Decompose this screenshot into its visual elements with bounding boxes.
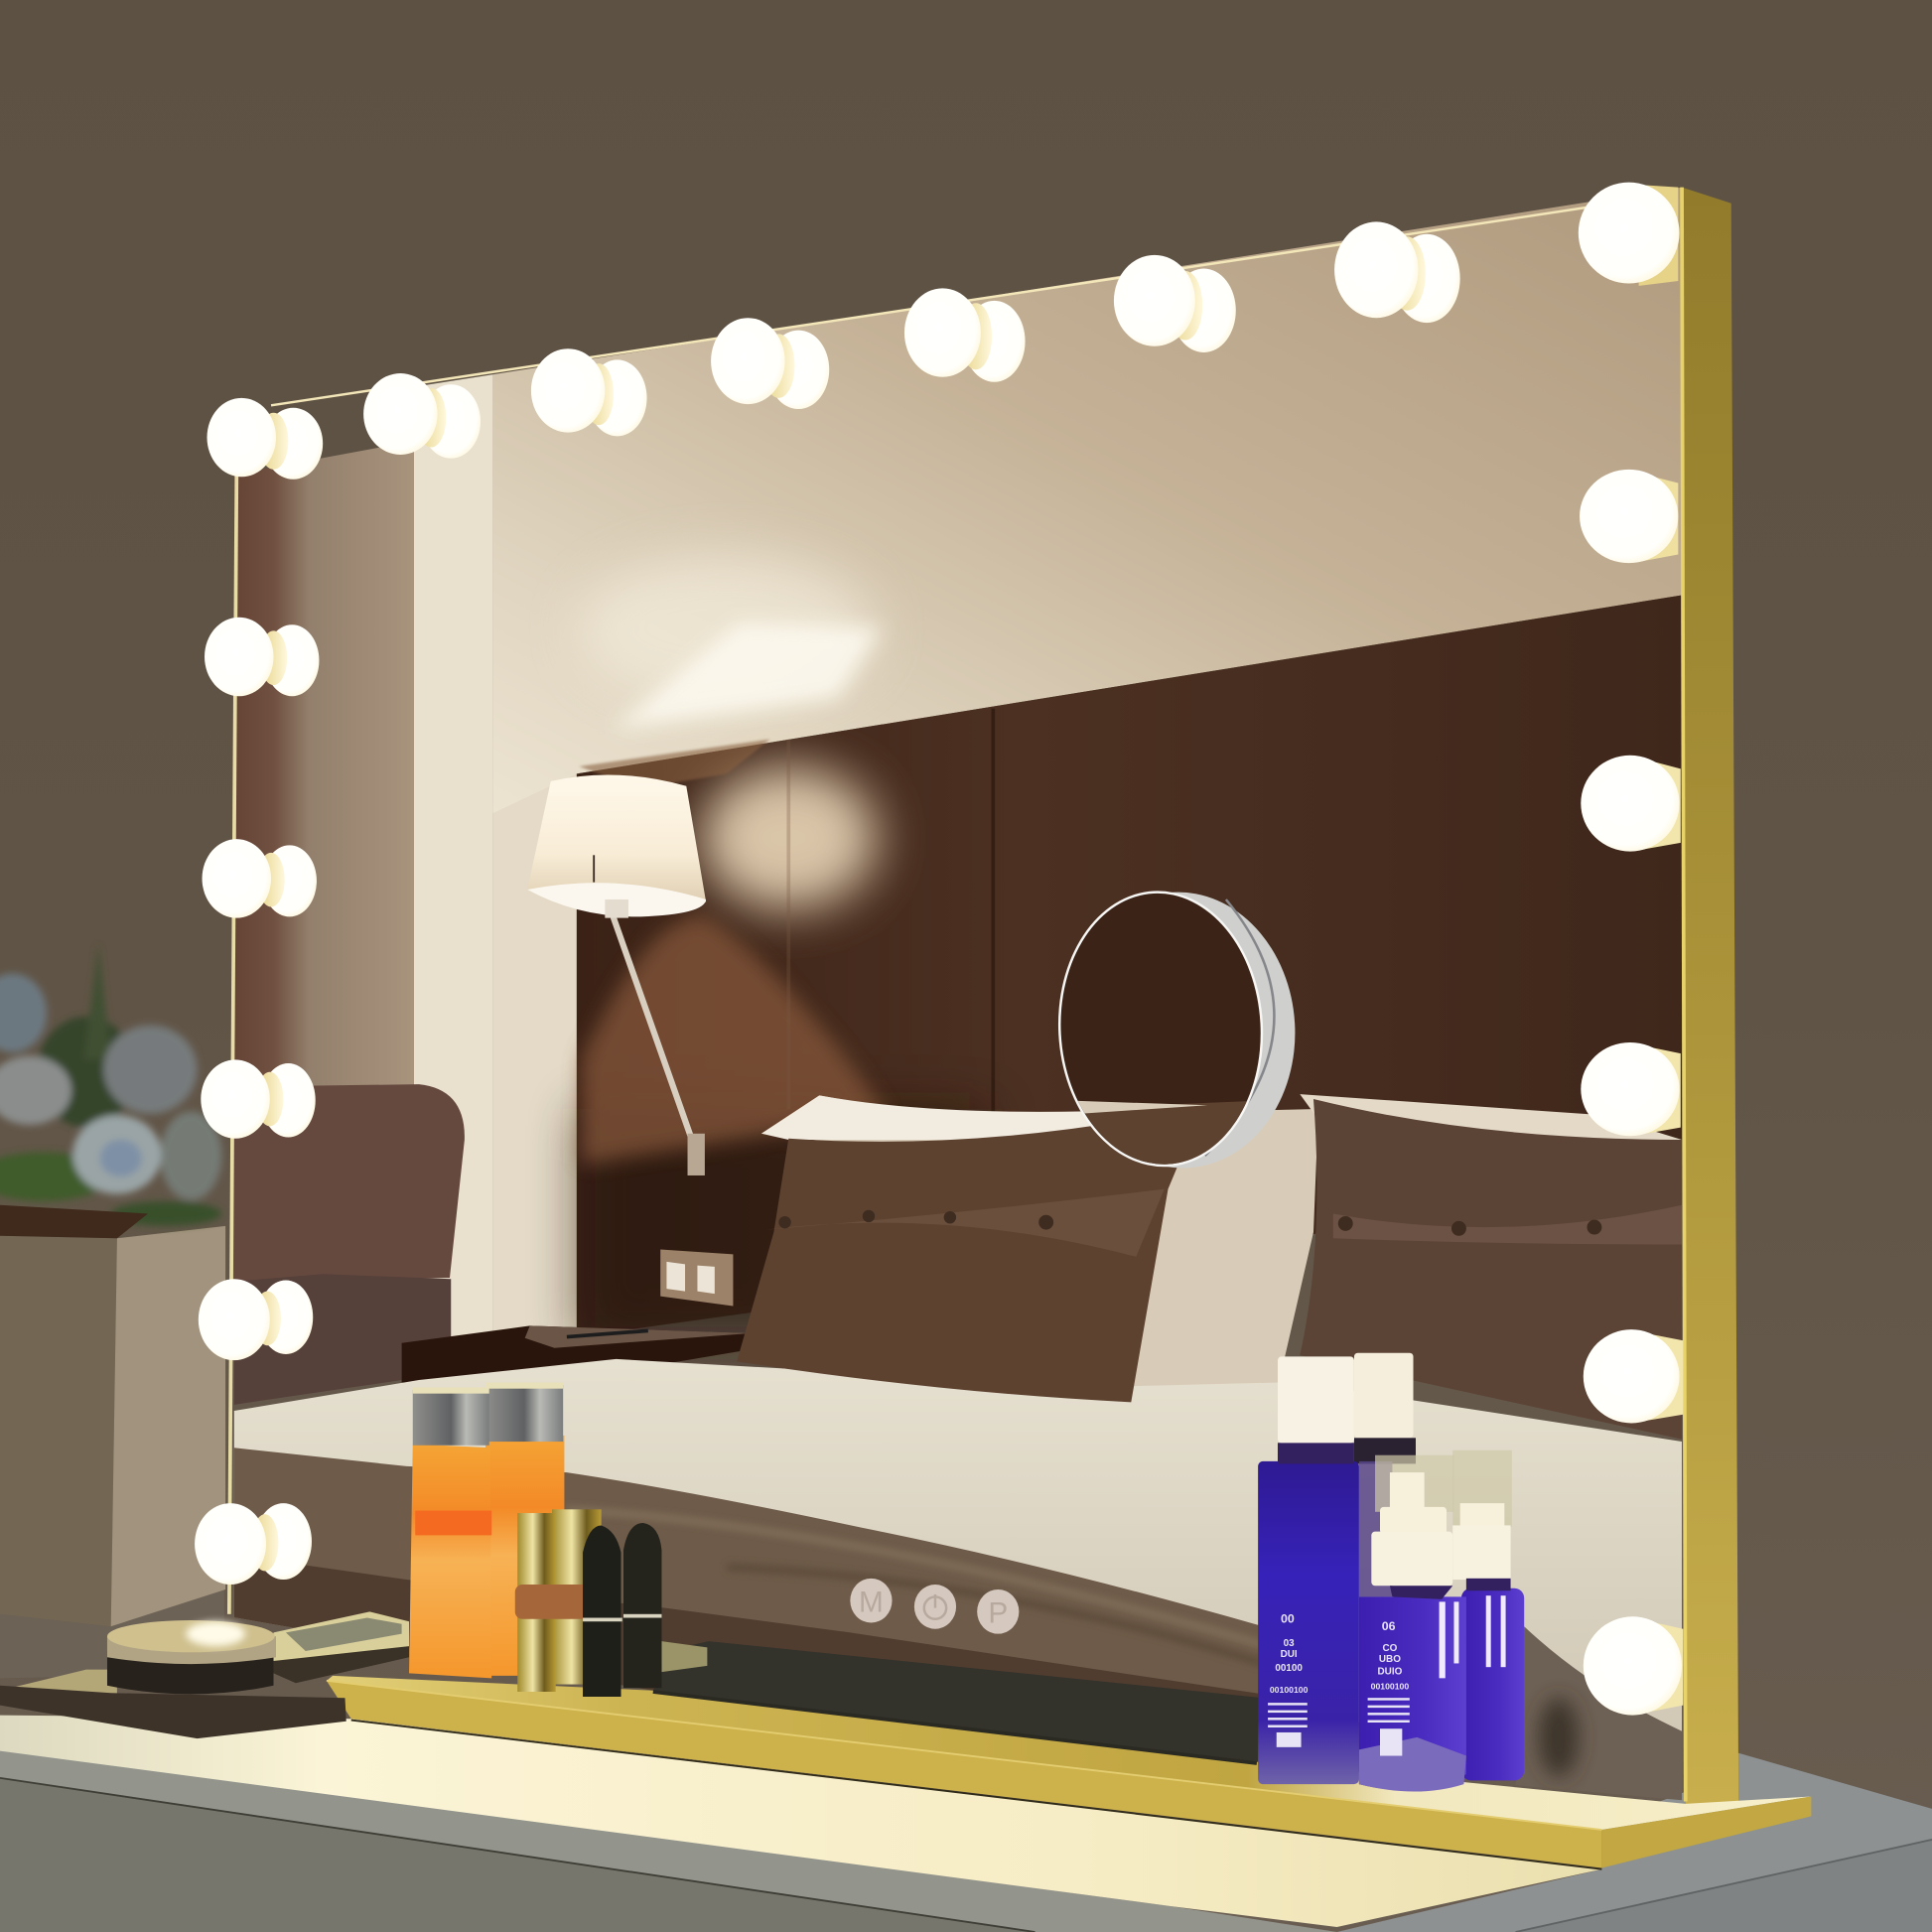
left dark wall [234,441,414,1109]
magnifier white edge [1051,886,1270,1172]
magnifier ring seam [1205,899,1274,1156]
bulb corner [1579,183,1680,286]
compact rim [107,1636,276,1664]
gold lipstick front [517,1513,556,1692]
dresser [0,1716,1932,1932]
compact lid [107,1620,275,1652]
bulb left 2 [205,618,319,696]
base front face [327,1681,1601,1867]
right bottle cap [485,1385,563,1442]
bulb right 6 [1584,1616,1683,1716]
wall lamp [527,774,706,1175]
tall bottle label: 00100 [1275,1663,1303,1674]
back cap and neck [1354,1353,1414,1438]
ceiling reflection [492,185,1682,813]
black tablet [0,1686,346,1738]
bulb top 3 [531,348,647,436]
armchair seat [234,1274,451,1405]
pump bottle label: 00100100 [1371,1682,1409,1692]
round magnifying mirror [1047,886,1302,1182]
pump bottle label: UBO [1379,1654,1401,1665]
headboard lit arch [582,917,888,1165]
brown pillow left [737,1126,1177,1402]
planter with flowers [0,942,225,1678]
planter side [111,1226,225,1626]
dresser corner panel [0,1749,1337,1932]
gold base [327,1676,1811,1869]
top row bulbs [207,221,1460,480]
pump bottle label [1368,1619,1410,1756]
touch button M [850,1579,893,1622]
bedside table [402,1325,752,1382]
magnifier back ring [1058,887,1302,1173]
touch button M: M [859,1586,884,1618]
bulb left 6 [195,1503,312,1585]
tall bottle label: 00100100 [1270,1685,1309,1695]
orange bottles [409,1382,564,1678]
bulb right 3 [1581,756,1681,852]
tall bottle cap [1278,1356,1354,1443]
left bottle body [409,1445,491,1678]
bed sheet [234,1359,1682,1749]
planter base shadow [0,1589,224,1678]
front pump bottle [1359,1455,1466,1792]
dresser right surface [1337,1751,1932,1932]
armchair [234,1084,465,1405]
right column bulbs [1579,183,1683,1716]
tall bottle label: 03 [1284,1638,1295,1649]
light wall columns [413,369,492,1355]
compact base [107,1651,274,1694]
cream pillow left [761,1095,1318,1386]
pump bottle label: 06 [1382,1619,1396,1633]
mirror with bedroom reflection [234,185,1682,1811]
bulb top 1 [207,398,323,480]
gold mirror side frame [1682,188,1738,1806]
lamp wall plate [688,1134,705,1175]
bright ceiling light patch [579,554,875,702]
bulb top 2 [363,373,481,459]
flower foliage [0,942,221,1226]
bulb left 3 [203,839,317,918]
bulb right 5 [1584,1329,1683,1423]
bulb left 5 [199,1279,313,1360]
mirror edge highlights [229,188,1686,1801]
headboard lamp glow [700,766,878,909]
wood panel seams [992,709,995,1121]
base top surface [327,1676,1811,1830]
lamp collar [605,899,628,918]
bulb top 4 [711,318,829,409]
black lipstick front [583,1525,621,1697]
mirror slot shadow [653,1692,1257,1763]
gold tray left side [0,1670,117,1707]
bulb top 6 [1114,255,1236,352]
tall bottle label: DUI [1281,1649,1298,1660]
planter rim [0,1205,148,1238]
tall bottle neck [1278,1443,1354,1463]
armchair back [234,1084,465,1282]
bulb right 2 [1580,470,1678,563]
right back bottle [1452,1450,1524,1780]
cosmetic compact [107,1620,276,1694]
dresser lit top [0,1716,1601,1927]
bulb top 5 [904,288,1026,382]
brown pillow right [1300,1094,1682,1440]
left bottle cap [413,1390,489,1446]
headboard lower shadow [579,1109,986,1343]
dresser front panel [0,1778,1035,1932]
lamp arm [614,918,695,1149]
bulb top 7 [1334,221,1460,323]
pump bottle label: CO [1382,1643,1398,1654]
ceiling shadow over lamp [579,740,770,788]
touch button power [914,1585,956,1629]
flat case behind compact [274,1611,409,1683]
lamp shade [527,774,706,907]
lamp shade underside [527,883,706,916]
base side [1601,1796,1811,1867]
dark wood headboard [577,595,1682,1337]
purple bottles [1258,1353,1524,1792]
tall bottle label: 00 [1281,1611,1295,1625]
tall bottle label [1268,1611,1309,1747]
bulb right 4 [1581,1042,1681,1136]
lipsticks [515,1509,661,1697]
pump bottle label: DUIO [1378,1667,1403,1678]
black lipstick back [623,1523,661,1688]
dark LED panel [653,1641,1263,1762]
touch button P [977,1589,1019,1634]
bulb left 4 [201,1059,316,1139]
magnifier glass [1047,888,1282,1182]
wall switch plate [660,1249,733,1307]
left column bulbs [195,618,319,1585]
planter front [0,1236,117,1626]
gold lipstick back [552,1509,602,1685]
touch button P: P [988,1596,1008,1629]
gold mirror foot reflection [661,1641,707,1672]
right bottle body [485,1436,564,1676]
brown blanket [234,1448,1682,1811]
tall bottle body [1258,1461,1359,1784]
